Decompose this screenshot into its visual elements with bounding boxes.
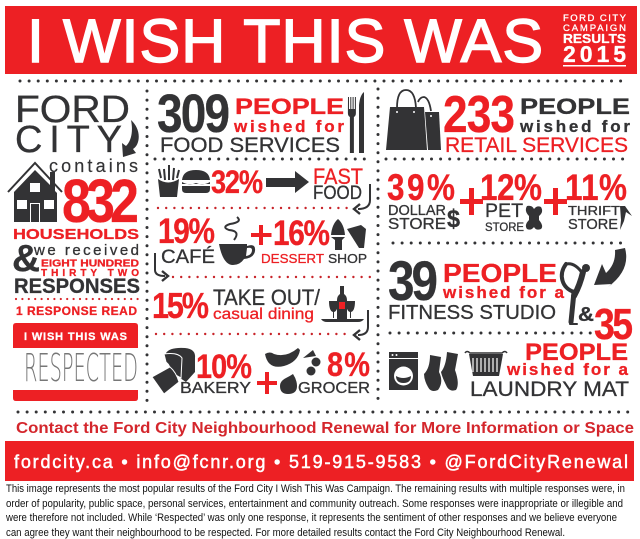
icon: curved arrow <box>155 253 168 281</box>
panel: food services <box>152 84 370 397</box>
plus sign <box>251 225 272 245</box>
responses: RESPONSES <box>14 275 140 298</box>
wished for a: wished for a <box>506 360 629 379</box>
16 percent: 16% <box>273 214 330 253</box>
casual dining label: casual dining <box>213 306 314 323</box>
laundry mat label: LAUNDRY MAT <box>470 378 629 401</box>
campaign results badge: FORD CITY <box>563 13 627 24</box>
dessert shop label: SHOP <box>328 251 367 266</box>
832 households: 832 <box>62 167 139 235</box>
people: PEOPLE <box>443 258 557 288</box>
icon: bread <box>152 348 195 394</box>
15 percent: 15% <box>152 287 209 327</box>
12 percent pet store: 12% <box>480 168 542 209</box>
39 percent dollar store <box>387 168 460 233</box>
plus sign <box>544 188 567 215</box>
fast food label: FAST <box>313 164 363 189</box>
wished for: wished for <box>233 117 344 136</box>
wished for a: wished for a <box>442 283 565 302</box>
icon: laundry basket <box>465 352 507 376</box>
contact line: Contact the Ford City Neighbourhood Renewal for More Information or Space <box>16 420 634 437</box>
icon: curved arrow <box>354 310 368 340</box>
take out label: TAKE OUT/ <box>213 285 321 310</box>
people: PEOPLE <box>525 339 628 366</box>
icon: curved arrow <box>354 184 370 214</box>
fast food label <box>313 164 363 204</box>
eight hundred thirty two <box>41 258 139 279</box>
icon: ice cream <box>331 219 345 250</box>
icon: fries <box>158 165 179 197</box>
campaign results badge: 2015 <box>563 41 626 67</box>
we received: we received <box>33 242 139 259</box>
icon: curved arrow <box>594 248 626 287</box>
icon: yoga figure <box>562 264 590 324</box>
campaign results badge: RESULTS <box>563 31 626 46</box>
retail services label: RETAIL SERVICES <box>445 134 628 157</box>
name tag: respected <box>13 323 138 401</box>
icon: bone <box>526 206 542 230</box>
people: PEOPLE <box>520 94 630 119</box>
11 percent thrift store: STORE <box>568 216 618 233</box>
icon: curved arrow <box>122 120 139 157</box>
icon: bananas <box>265 348 300 367</box>
bakery label: BAKERY <box>180 380 251 397</box>
footnote text: can agree they want their neighbourhood to be respected. For more detailed results contact the Ford City Neighbourhood Renewal. <box>6 527 565 539</box>
8 percent: 8% <box>327 345 370 384</box>
contact banner <box>5 441 634 481</box>
panel: fitness studio <box>388 248 626 326</box>
dessert shop label <box>261 251 367 266</box>
39 percent dollar store: STORE <box>388 216 446 233</box>
eight hundred thirty two: EIGHT HUNDRED <box>41 258 139 270</box>
eight hundred thirty two: THIRTY TWO <box>41 268 139 279</box>
name tag: respected: RESPECTED <box>24 346 138 390</box>
10 percent: 10% <box>196 347 252 386</box>
title: I WISH THIS WAS <box>27 7 543 75</box>
food services label: FOOD SERVICES <box>160 134 340 157</box>
39 number: 39 <box>388 250 438 313</box>
icon: washing machine <box>389 352 418 390</box>
icon: shopping bags <box>386 90 441 150</box>
name tag: respected: I WISH THIS WAS <box>24 331 127 343</box>
19 percent: 19% <box>158 212 215 251</box>
people: PEOPLE <box>235 94 344 119</box>
contains: contains <box>49 156 138 176</box>
icon: socks <box>424 352 458 391</box>
39 percent dollar store: DOLLAR <box>388 202 446 219</box>
icon: right arrow <box>266 171 309 193</box>
households label: HOUSEHOLDS <box>13 226 139 243</box>
1 response read: 1 RESPONSE READ <box>16 304 137 318</box>
fast food label: FOOD <box>313 183 362 204</box>
Ford City heading: FORD <box>15 89 130 131</box>
icon: wine bottle tray <box>321 286 364 322</box>
plus sign <box>460 188 483 215</box>
Ford City heading: CITY <box>15 119 122 161</box>
header banner <box>5 6 637 75</box>
icon: cherries <box>303 350 320 376</box>
32 percent: 32% <box>211 165 263 201</box>
11 percent thrift store: THRIFT <box>568 203 620 218</box>
Ford City heading <box>15 89 130 161</box>
contact banner: fordcity.ca • info@fcnr.org • 519-915-9583 • @FordCityRenewal <box>14 452 628 472</box>
panel: laundry mat <box>389 299 633 401</box>
footnote text <box>5 483 625 539</box>
35 number: 35 <box>594 299 633 349</box>
12 percent pet store <box>480 168 542 234</box>
icon: burger <box>182 170 210 193</box>
dessert shop label: DESSERT <box>261 251 324 266</box>
icon: fork and knife <box>348 92 364 153</box>
icon: cake slice <box>347 225 366 248</box>
309 number: 309 <box>157 84 230 144</box>
fitness studio label: FITNESS STUDIO <box>388 302 556 324</box>
233 number: 233 <box>443 86 515 144</box>
11 percent thrift store <box>565 168 632 233</box>
campaign results badge <box>563 13 627 67</box>
cafe label: CAFÉ <box>161 247 215 268</box>
campaign results badge: CAMPAIGN <box>563 23 626 34</box>
icon: coffee cup <box>219 217 255 265</box>
39 percent dollar store: $ <box>447 205 460 233</box>
icon: high heel <box>620 206 632 230</box>
12 percent pet store: STORE <box>485 220 524 234</box>
ampersand: & <box>12 238 40 280</box>
icon: pear <box>280 374 297 394</box>
11 percent thrift store: 11% <box>565 168 627 209</box>
wished for: wished for <box>519 117 630 136</box>
plus sign <box>257 372 277 394</box>
panel: retail services <box>386 86 632 234</box>
icon: house <box>8 163 62 222</box>
panel: Ford City left column <box>8 89 140 401</box>
39 percent dollar store: 39% <box>387 168 455 209</box>
grocer label: GROCER <box>298 380 370 397</box>
ampersand: & <box>578 304 594 326</box>
12 percent pet store: PET <box>485 201 523 222</box>
